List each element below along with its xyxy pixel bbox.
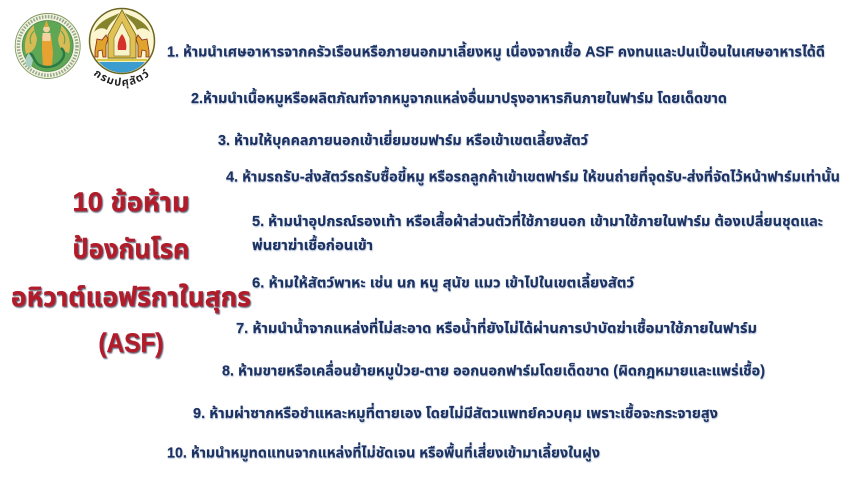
item 3: 3. ห้ามให้บุคคลภายนอกเข้าเยี่ยมชมฟาร์ม หรือเข้าเขตเลี้ยงสัตว์ <box>218 129 588 149</box>
list of 10 prohibitions <box>167 40 840 462</box>
item 8: 8. ห้ามขายหรือเคลื่อนย้ายหมูป่วย-ตาย ออกนอกฟาร์มโดยเด็ดขาด (ผิดกฎหมายและแพร่เชื้อ) <box>222 360 765 380</box>
title: 10 ข้อห้าม <box>72 187 190 217</box>
item 6: 6. ห้ามให้สัตว์พาหะ เช่น นก หนู สุนัข แมว เข้าไปในเขตเลี้ยงสัตว์ <box>252 271 634 292</box>
item 5: พ่นยาฆ่าเชื้อก่อนเข้า <box>252 234 373 254</box>
title: ป้องกันโรค <box>72 234 190 264</box>
title: (ASF) <box>98 328 164 358</box>
item 9: 9. ห้ามผ่าซากหรือชำแหละหมูที่ตายเอง โดยไม่มีสัตวแพทย์ควบคุม เพราะเชื้อจะกระจายสูง <box>193 402 718 423</box>
item 5: 5. ห้ามนำอุปกรณ์รองเท้า หรือเสื้อผ้าส่วนตัวที่ใช้ภายนอก เข้ามาใช้ภายในฟาร์ม ต้องเปลี่ยนชุดและ <box>252 210 823 230</box>
item 4: 4. ห้ามรถรับ-ส่งสัตว์รถรับซื้อขี้หมู หรือรถลูกค้าเข้าเขตฟาร์ม ให้ขนถ่ายที่จุดรับ-ส่งที่จัดไว้หน้าฟาร์มเท่านั้น <box>226 165 840 186</box>
icon: Department of Livestock Development seal <box>88 8 156 88</box>
icon: Ministry of Agriculture seal <box>15 14 80 78</box>
item 5 <box>252 210 823 254</box>
title <box>11 187 251 358</box>
item 1: 1. ห้ามนำเศษอาหารจากครัวเรือนหรือภายนอกมาเลี้ยงหมู เนื่องจากเชื้อ ASF คงทนและปนเปื้อนในเศษอาหารได้ดี <box>167 40 825 62</box>
item 7: 7. ห้ามนำน้ำจากแหล่งที่ไม่สะอาด หรือน้ำที่ยังไม่ได้ผ่านการบำบัดฆ่าเชื้อมาใช้ภายในฟาร์ม <box>236 317 757 337</box>
title: อหิวาต์แอฟริกาในสุกร <box>11 282 251 313</box>
logo caption: กรมปศุสัตว์ <box>94 68 148 88</box>
item 10: 10. ห้ามนำหมูทดแทนจากแหล่งที่ไม่ชัดเจน หรือพื้นที่เสี่ยงเข้ามาเลี้ยงในฝูง <box>167 441 600 462</box>
item 2: 2.ห้ามนำเนื้อหมูหรือผลิตภัณฑ์จากหมูจากแหล่งอื่นมาปรุงอาหารกินภายในฟาร์ม โดยเด็ดขาด <box>191 87 727 108</box>
